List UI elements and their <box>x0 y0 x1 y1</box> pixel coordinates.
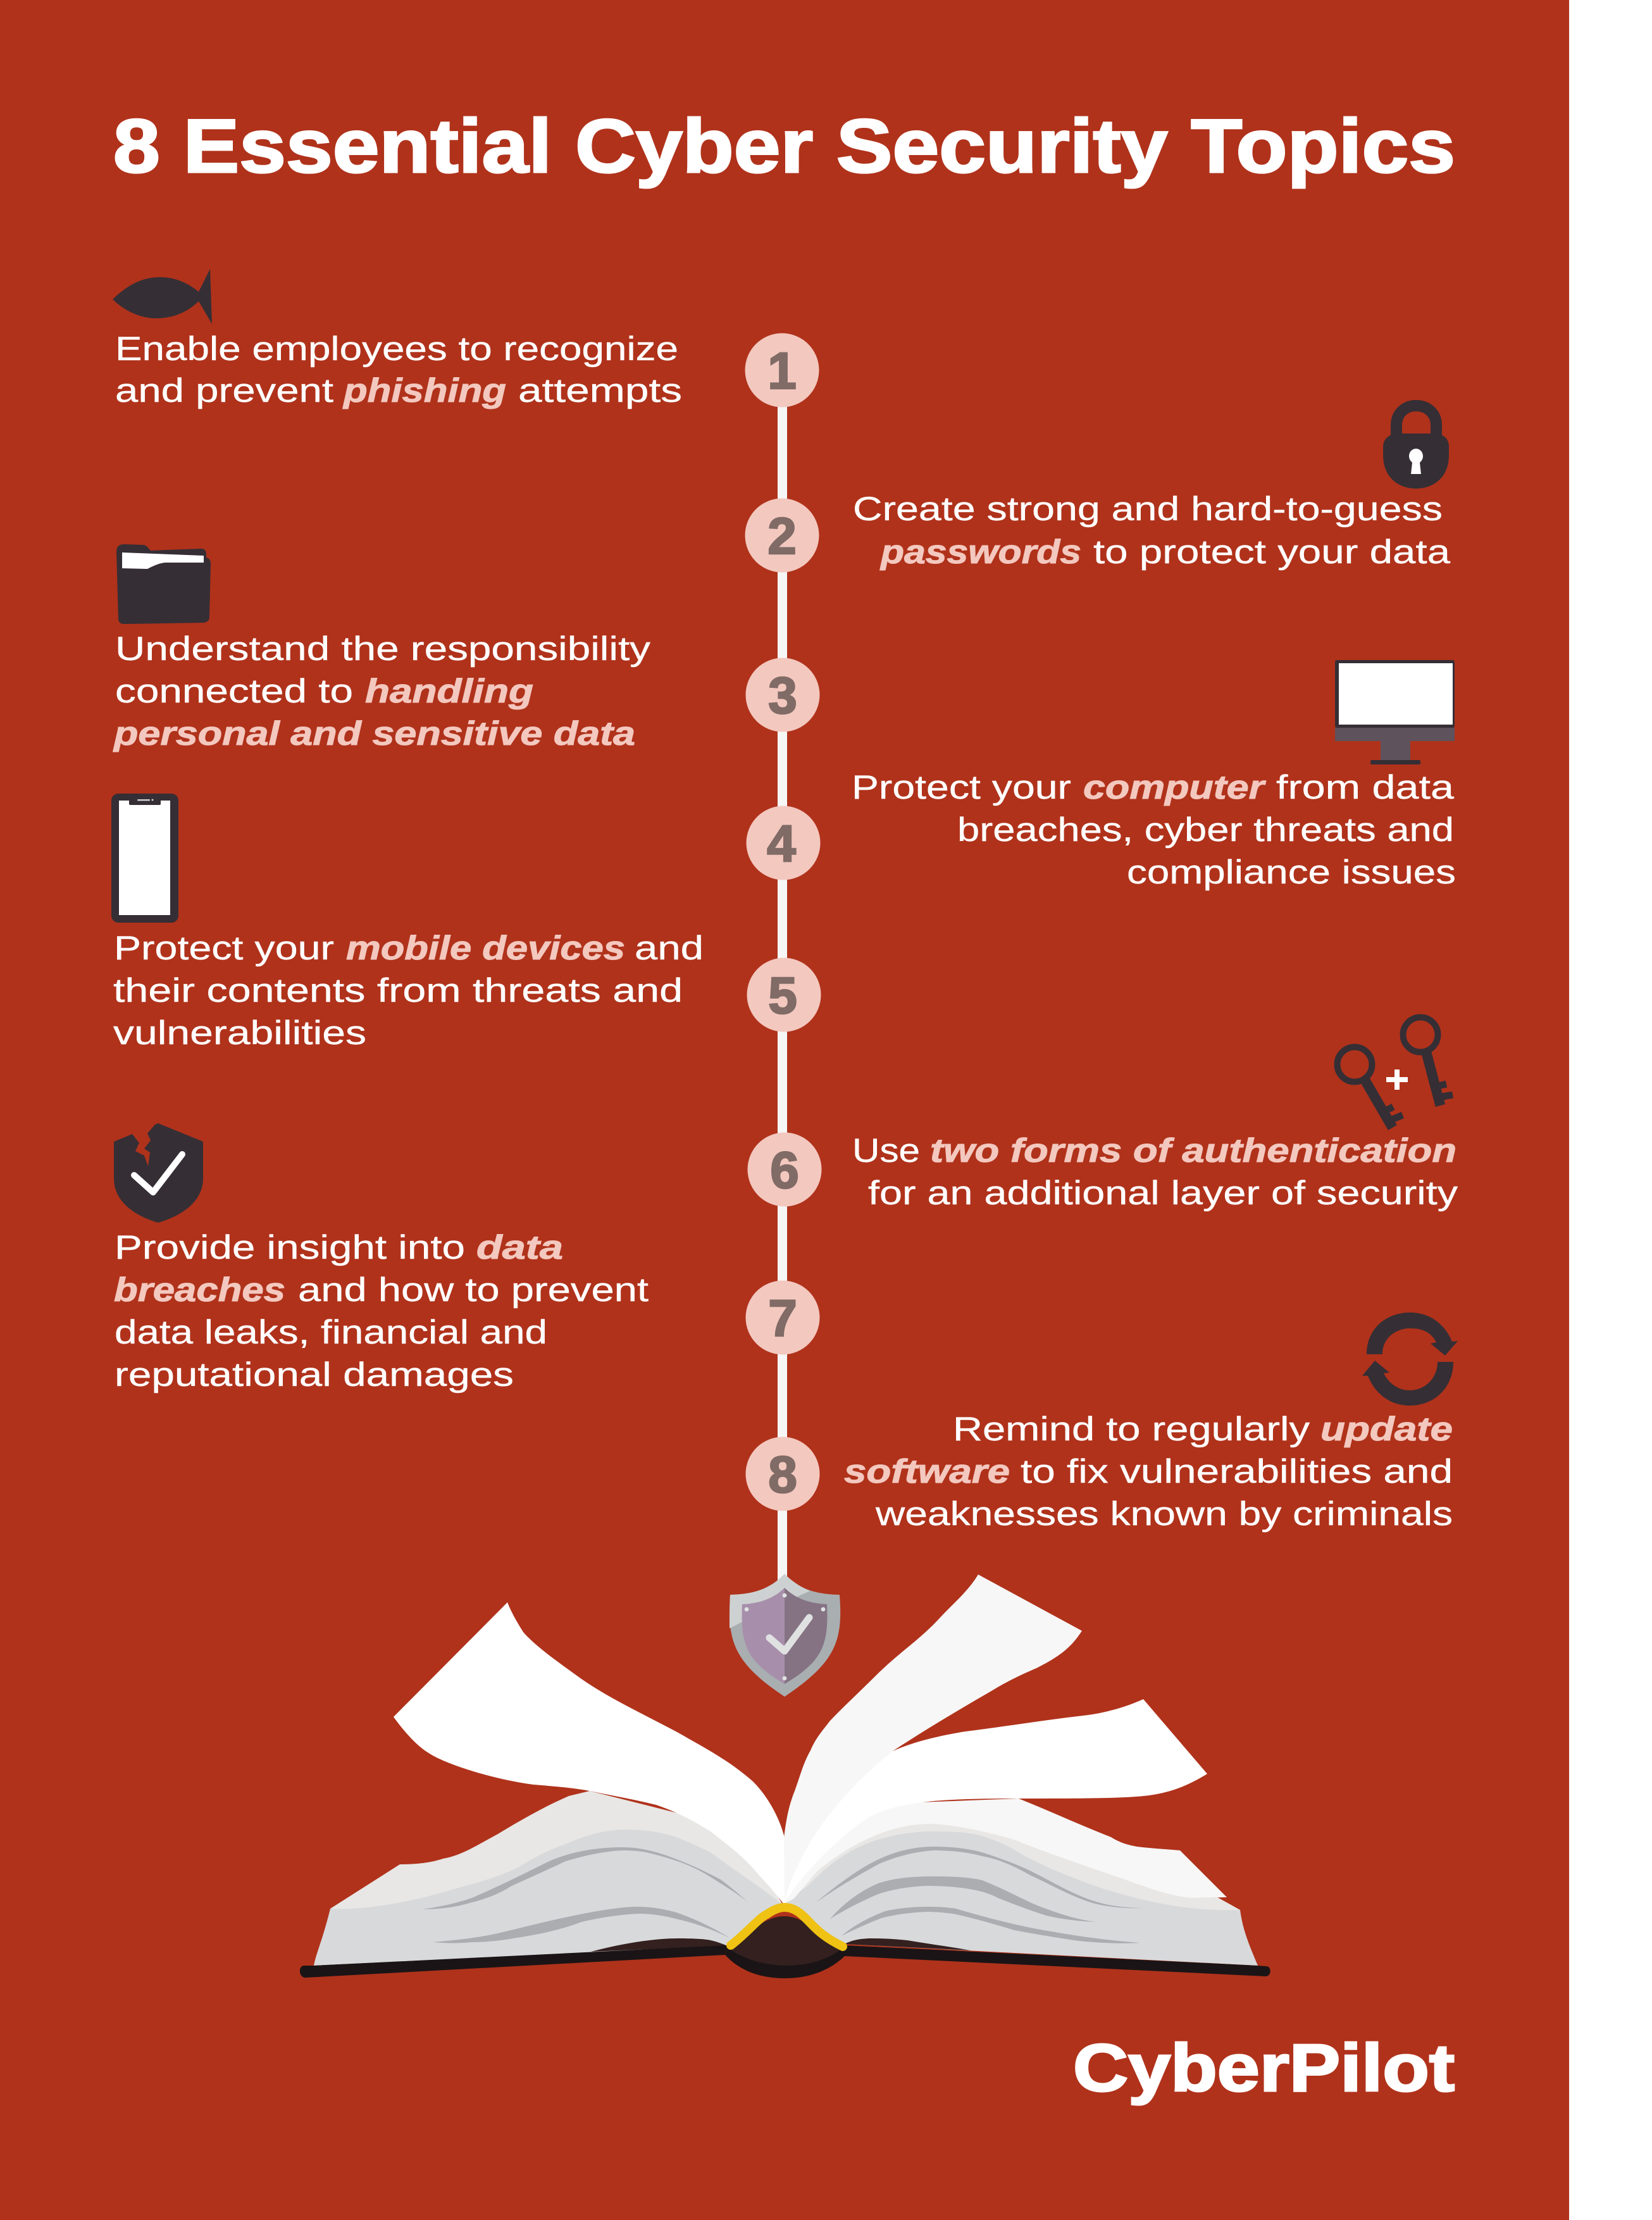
timeline numbers: 5 <box>768 967 797 1025</box>
illustration: open book <box>300 1575 1270 1978</box>
logo: CyberPilot <box>1073 2031 1455 2105</box>
text: handling data: connected to <box>115 673 353 710</box>
timeline numbers: 1 <box>767 342 797 400</box>
text: data breaches: Provide insight into <box>115 1229 465 1266</box>
text: handling data: handling <box>365 673 533 710</box>
text: passwords: Create strong and hard-to-guess <box>853 490 1443 528</box>
text: computer <box>852 769 1456 891</box>
timeline line <box>778 370 787 1582</box>
text: data breaches: and how to prevent <box>298 1271 649 1309</box>
text: mobile devices: and <box>635 930 704 967</box>
icon: lock <box>1383 406 1449 489</box>
text: two-factor authentication: Use <box>852 1132 920 1169</box>
timeline numbers: 3 <box>768 667 797 725</box>
icon: broken shield <box>114 1123 203 1223</box>
text: data breaches: reputational damages <box>115 1356 514 1394</box>
text: data breaches <box>114 1229 649 1394</box>
text: mobile devices <box>113 930 704 1052</box>
text: mobile devices: mobile devices <box>346 930 625 967</box>
text: computer: from data <box>1276 769 1455 806</box>
title: 8 Essential Cyber Security Topics <box>113 104 1455 189</box>
text: computer: compliance issues <box>1127 854 1456 891</box>
icon: update arrows <box>1362 1313 1458 1406</box>
text: two-factor authentication <box>852 1132 1458 1212</box>
text: two-factor authentication: two forms of authentication <box>930 1132 1456 1169</box>
text: mobile devices: vulnerabilities <box>113 1014 366 1052</box>
text: mobile devices: their contents from threats and <box>113 972 683 1009</box>
yellow bookmark <box>731 1907 843 1947</box>
text: phishing: and prevent <box>115 372 333 409</box>
text: data breaches: data <box>476 1229 563 1266</box>
text: computer: breaches, cyber threats and <box>957 811 1454 849</box>
text: handling data: personal and sensitive data <box>113 715 635 752</box>
text: data breaches: breaches <box>114 1271 285 1309</box>
text: passwords <box>853 490 1451 571</box>
text: passwords: to protect your data <box>1093 533 1451 571</box>
text: mobile devices: Protect your <box>114 930 334 967</box>
text: phishing: phishing <box>342 372 506 409</box>
text: update software: weaknesses known by criminals <box>875 1495 1453 1533</box>
text: update software: Remind to regularly <box>953 1411 1310 1448</box>
brown cover inner <box>591 1938 728 1952</box>
timeline numbers: 2 <box>767 508 797 565</box>
right page block <box>784 1831 1258 1966</box>
text: update software: to fix vulnerabilities and <box>1021 1453 1453 1490</box>
text: phishing <box>115 330 682 409</box>
text: passwords: passwords <box>879 533 1081 571</box>
right tall page <box>784 1575 1082 1904</box>
text: data breaches: data leaks, financial and <box>115 1314 547 1351</box>
text: computer: computer <box>1083 769 1267 806</box>
text: update software <box>844 1411 1453 1533</box>
text: computer: Protect your <box>852 769 1071 806</box>
timeline numbers <box>745 333 821 1511</box>
text: update software: update <box>1320 1411 1453 1448</box>
left under page <box>330 1791 782 1930</box>
text: two-factor authentication: for an additional layer of security <box>868 1175 1458 1212</box>
text: handling data: Understand the responsibility <box>115 630 651 668</box>
icon: fish <box>113 269 212 324</box>
cover <box>300 1945 727 1978</box>
text: handling data <box>113 630 651 752</box>
text: phishing: attempts <box>518 372 682 409</box>
timeline numbers: 7 <box>768 1290 797 1347</box>
icon: shield with check <box>730 1574 840 1697</box>
icon: phone <box>111 794 178 923</box>
left page block <box>314 1830 781 1966</box>
icon: monitor <box>1335 660 1455 764</box>
text: update software: software <box>844 1453 1010 1490</box>
page swooshes <box>423 1847 1145 1943</box>
timeline numbers: 6 <box>770 1142 799 1199</box>
icon: two keys <box>1338 1018 1453 1129</box>
right under page <box>784 1799 1227 1905</box>
timeline numbers: 4 <box>767 815 796 873</box>
right mid page <box>784 1824 1240 1930</box>
timeline numbers: 8 <box>768 1446 797 1504</box>
text: phishing: Enable employees to recognize <box>115 330 678 368</box>
icon: folder <box>116 544 211 624</box>
right lower page <box>784 1699 1207 1904</box>
left flying page <box>394 1602 786 1904</box>
